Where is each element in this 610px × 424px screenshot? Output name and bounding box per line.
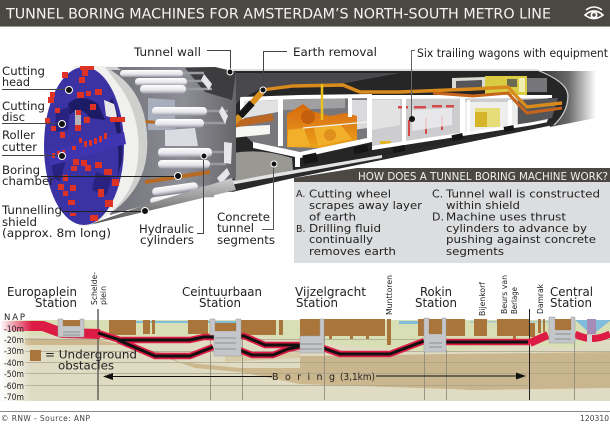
boring arrow: Boring [272,372,335,383]
steps C and D: C. [432,188,443,200]
steps C and D: Tunnel wall is constructed [445,188,600,200]
label: cutting head [2,64,72,94]
steps A and B [296,188,422,258]
shield shell [85,178,236,226]
footer: 120310 [580,414,609,423]
purple structure [587,319,596,343]
steps A and B: of earth [309,210,356,224]
street names [90,272,545,316]
hydraulic cylinders [120,70,232,205]
tunnel boring machine illustration [44,66,596,226]
label: tunnelling shield: (approx. 8m long) [2,226,111,240]
shield interior [105,67,236,215]
label: cutting head: head [2,75,30,89]
label: cutting disc [2,99,66,128]
station names: Station [415,296,457,310]
geological cross-section [0,309,610,403]
legend: underground obstacles: = Underground [45,348,137,362]
panel heading: HOW DOES A TUNNEL BORING MACHINE WORK? [358,171,608,183]
steps A and B: B. [296,224,306,235]
station names [7,285,593,310]
tunnel interior [200,68,567,192]
station names: Central [550,285,593,299]
stations [58,317,575,356]
label: boring chamber: chamber [2,174,54,188]
label: concrete tunnel segments: tunnel [217,221,254,235]
cutters [45,66,125,221]
footer [0,411,610,423]
steps C and D: cylinders to advance by [446,222,588,235]
depth axis: -70m [4,393,24,403]
label: hydraulic cylinders [139,153,207,247]
concrete tunnel segments [233,151,293,181]
label: boring chamber [2,163,182,188]
depth axis: NAP [4,313,25,323]
label: roller cutter: cutter [2,140,37,154]
depth grid lines [25,340,610,386]
label: hydraulic cylinders: Hydraulic [139,222,194,236]
wagons 2 and 3 [370,76,558,150]
title: TUNNEL BORING MACHINES FOR AMSTERDAM’S NORTH-SOUTH METRO LINE [5,6,551,22]
vertical markers [97,309,99,400]
depth axis [4,313,25,403]
depth axis: -40m [4,359,24,369]
underground obstacles [109,319,545,345]
label: tunnel wall: Tunnel wall [133,45,201,59]
station names: Ceintuurbaan [182,285,262,299]
street names: Damrak [536,283,545,314]
label: roller cutter: Roller [2,128,35,142]
station names: Vijzelgracht [295,285,366,299]
label: tunnel wall [133,45,233,75]
steps A and B: continually [309,233,374,246]
upper equipment [452,77,485,90]
soil layers [0,320,610,352]
station names: Station [35,296,77,310]
wagon 1 with earth removal machinery [230,94,373,167]
steps A and B: A. [296,189,305,200]
label: tunnelling shield [1,203,148,240]
station names: Station [550,296,592,310]
title bar [0,0,610,27]
station names: Europaplein [7,285,77,299]
street names: Berlage [510,287,519,314]
legend: underground obstacles: obstacles [58,358,114,372]
icon: eye [585,7,603,18]
label: cutting disc: Cutting [2,99,45,113]
steps C and D: D. [432,210,444,224]
boring arrow [103,372,526,383]
shield ring [73,66,147,226]
steps A and B: Cutting wheel [309,188,391,200]
cutting head [44,66,126,225]
label: concrete tunnel segments [217,161,277,247]
street names: plein [99,286,108,305]
label: concrete tunnel segments: Concrete [217,210,270,224]
depth axis: -60m [4,382,24,392]
clevis brackets [201,74,232,184]
water [132,320,610,335]
legend: underground obstacles [30,348,137,372]
depth axis: -30m [4,347,24,357]
depth axis: -20m [4,336,24,346]
label: tunnelling shield: Tunnelling [1,203,62,217]
label: roller cutter [2,128,66,160]
steps A and B: Drilling fluid [309,222,381,235]
label: concrete tunnel segments: segments [217,233,275,247]
steps A and B: scrapes away layer [309,199,422,212]
label: earth removal [260,45,377,93]
label: cutting disc: disc [2,110,25,124]
panel: how does a tunnel boring machine work [294,168,610,263]
label: cutting head: Cutting [2,64,45,78]
station names: Station [296,296,338,310]
orange pipes [230,84,562,127]
station names: Station [199,296,241,310]
steps C and D: pushing against concrete [446,233,596,246]
label: earth removal: Earth removal [293,45,377,59]
steps A and B: removes earth [309,245,396,258]
label: tunnelling shield: shield [2,215,37,229]
bogies and track [230,121,553,192]
footer: © RNW - Source: ANP [1,414,90,423]
boring arrow: (3,1km) [340,372,375,383]
station names: Rokin [420,285,452,299]
label: hydraulic cylinders: cylinders [140,233,194,247]
street names: Schelde- [90,272,99,305]
tunnel exterior end [535,71,596,127]
steps C and D: within shield [446,199,520,212]
orange machinery [287,104,357,148]
label: boring chamber: Boring [2,163,40,177]
street names: Munttoren [385,275,394,315]
steps C and D [432,188,600,258]
label: six trailing wagons [409,46,608,122]
depth axis: -50m [4,370,24,380]
depth axis: -10m [4,325,24,335]
street names: Bijenkorf [478,282,487,316]
tunnel route [0,326,610,356]
steps C and D: segments [446,245,504,258]
street names: Beurs van [500,275,509,314]
steps C and D: Machine uses thrust [446,210,567,224]
